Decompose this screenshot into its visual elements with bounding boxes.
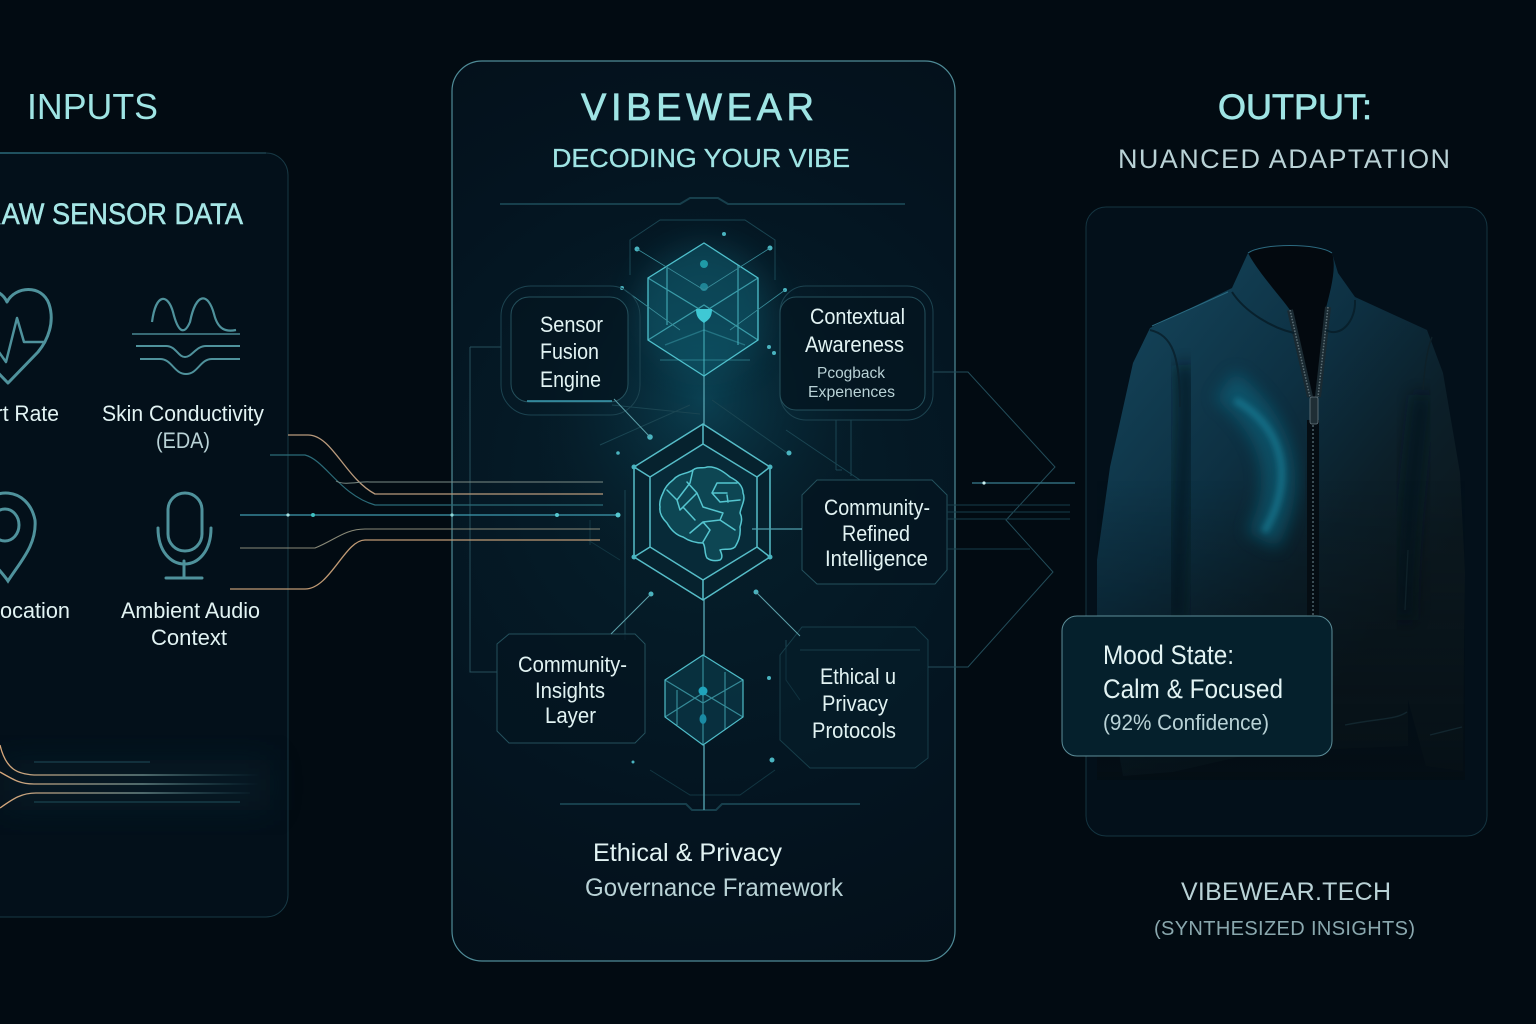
inputs heading: INPUTS xyxy=(27,86,158,127)
output heading xyxy=(1118,88,1450,174)
hexagon: top data cube xyxy=(638,243,770,376)
jacket swirl glow xyxy=(1225,385,1282,540)
output heading: OUTPUT: xyxy=(1218,88,1372,127)
panel: inputs xyxy=(0,86,288,917)
lower data streams xyxy=(0,745,270,810)
box: community-insights layer: Insights xyxy=(535,678,605,703)
circuit traces xyxy=(470,220,860,795)
icon: brain xyxy=(660,467,744,561)
label: ambient audio context: Context xyxy=(151,625,227,650)
footer: source xyxy=(1154,878,1415,940)
icon: heart rate xyxy=(0,290,51,383)
governance framework text xyxy=(585,839,843,902)
box: community-refined intelligence: Intelligence xyxy=(825,546,928,571)
jacket neck opening xyxy=(1248,246,1334,397)
box: contextual awareness: Contextual xyxy=(810,304,905,329)
box: sensor fusion engine: Engine xyxy=(540,367,601,392)
box: ethical privacy protocols: Protocols xyxy=(812,718,896,743)
jacket seams xyxy=(1150,246,1462,735)
box: ethical privacy protocols xyxy=(756,592,928,768)
title: VIBEWEAR xyxy=(581,87,814,129)
box: contextual awareness: Expenences xyxy=(808,384,895,401)
node dots: top hexagon xyxy=(620,232,787,355)
data streams: inputs to core xyxy=(230,435,620,589)
jacket sleeve shading xyxy=(1176,365,1422,620)
node dots: brain xyxy=(616,434,792,764)
box: community-refined intelligence: Refined xyxy=(842,521,910,546)
subtitle: DECODING YOUR VIBE xyxy=(552,143,850,173)
icon: skin conductivity xyxy=(132,298,240,374)
jacket illustration xyxy=(1097,246,1465,780)
footer: source: (SYNTHESIZED INSIGHTS) xyxy=(1154,918,1415,940)
label: skin conductivity xyxy=(102,401,264,453)
spine connector xyxy=(703,376,705,810)
callout: mood state: Calm & Focused xyxy=(1103,674,1283,704)
footer: source: VIBEWEAR.TECH xyxy=(1181,878,1391,906)
box: community-insights layer: Community- xyxy=(518,652,627,677)
icon: microphone xyxy=(158,493,211,578)
box: community-refined intelligence: Community- xyxy=(824,495,930,520)
box: contextual awareness: Awareness xyxy=(805,332,904,357)
box: ethical privacy protocols: Ethical u xyxy=(820,664,896,689)
panel: output jacket xyxy=(1062,207,1487,836)
label: ambient audio context xyxy=(121,598,260,650)
panel: vibewear core xyxy=(452,61,955,961)
box: sensor fusion engine: Fusion xyxy=(540,339,599,364)
box: community-insights layer xyxy=(497,594,651,743)
box: sensor fusion engine xyxy=(501,286,650,437)
label: skin conductivity: Skin Conductivity xyxy=(102,401,264,426)
box: contextual awareness xyxy=(780,286,933,420)
output heading: NUANCED ADAPTATION xyxy=(1118,144,1450,174)
output connector arrows xyxy=(928,372,1075,667)
box: ethical privacy protocols: Privacy xyxy=(822,691,888,716)
hexagon: bottom data cube xyxy=(665,655,743,745)
governance framework text: Ethical & Privacy xyxy=(593,839,783,867)
icon: location pin xyxy=(0,493,35,581)
callout: mood state: Mood State: xyxy=(1103,640,1234,670)
box: contextual awareness: Pcogback xyxy=(817,365,886,382)
box: community-refined intelligence xyxy=(752,480,947,584)
hexagon: brain core xyxy=(634,424,770,600)
box: sensor fusion engine: Sensor xyxy=(540,312,603,337)
jacket zipper xyxy=(1290,307,1328,618)
box: community-insights layer: Layer xyxy=(545,703,596,728)
label: ambient audio context: Ambient Audio xyxy=(121,598,260,623)
callout: mood state xyxy=(1062,616,1332,756)
callout: mood state: (92% Confidence) xyxy=(1103,710,1269,735)
label: skin conductivity: (EDA) xyxy=(156,428,210,453)
governance framework text: Governance Framework xyxy=(585,874,843,902)
